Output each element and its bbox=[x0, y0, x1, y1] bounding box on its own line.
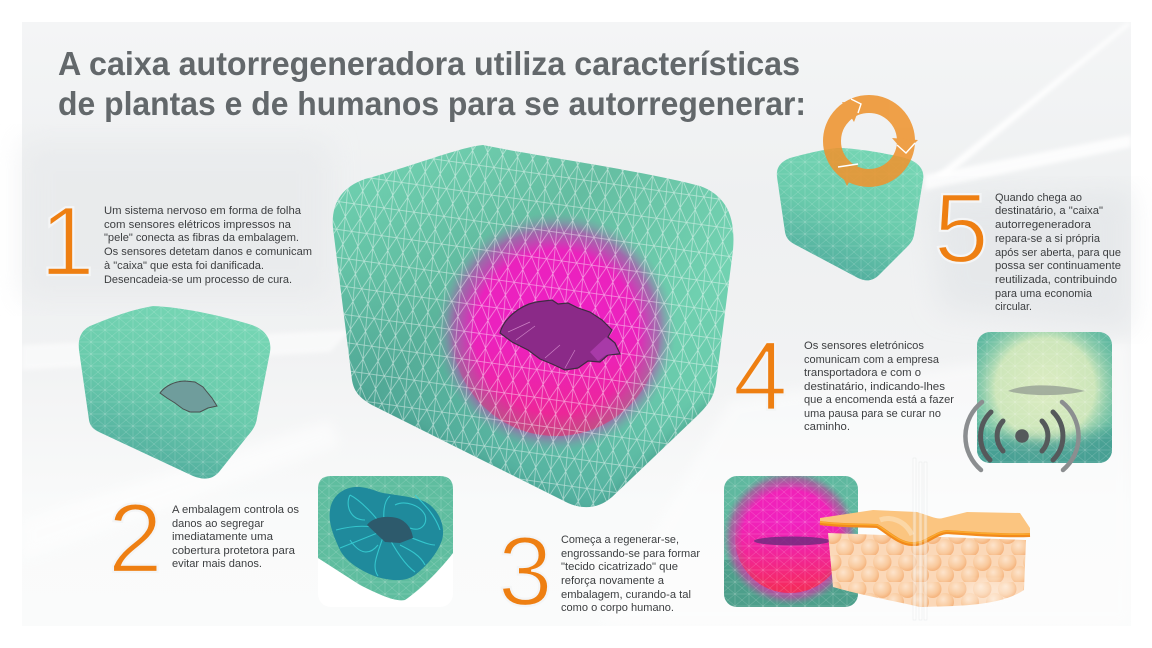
title: A caixa autorregeneradora utiliza características bbox=[58, 45, 800, 82]
step 3 text: engrossando-se para formar bbox=[561, 548, 700, 560]
step 1 box with hole bbox=[79, 306, 270, 479]
step 3 text: "tecido cicatrizado" que bbox=[561, 561, 678, 573]
step 2 text: imediatamente uma bbox=[172, 531, 274, 543]
step 4 text bbox=[804, 340, 954, 433]
step 4 bbox=[736, 332, 1112, 472]
step 3 bbox=[498, 458, 1030, 626]
step 5 text: autorregeneradora bbox=[995, 219, 1092, 231]
step 4 text: Os sensores eletrónicos bbox=[804, 340, 925, 352]
step 3 text: reforça novamente a bbox=[561, 575, 665, 587]
wound in the central box bbox=[500, 300, 620, 370]
step 2 tile: protective coating bbox=[318, 476, 453, 607]
step 4 text: uma pausa para se curar no bbox=[804, 408, 941, 420]
step 5 bbox=[777, 99, 1121, 313]
number 4: 4 bbox=[733, 321, 788, 431]
icon: wireless signal bbox=[965, 402, 1079, 470]
step 4 text: destinatário, indicando-lhes bbox=[804, 381, 946, 393]
step 2 text: evitar mais danos. bbox=[172, 558, 262, 570]
step 5 text: Quando chega ao bbox=[995, 192, 1082, 204]
step 1 text: Um sistema nervoso em forma de folha bbox=[104, 205, 302, 217]
number 1: 1 bbox=[40, 186, 95, 296]
step 5 text bbox=[995, 192, 1121, 313]
central damaged box with pink healing zone bbox=[330, 140, 740, 530]
step 4 text: que a encomenda está a fazer bbox=[804, 394, 954, 406]
number 5: 5 bbox=[934, 173, 989, 283]
step 1 text bbox=[104, 205, 312, 286]
step 2 text: A embalagem controla os bbox=[172, 504, 299, 516]
skin cross-section with tissue layers bbox=[820, 458, 1030, 620]
step 1 text: com sensores elétricos impressos na bbox=[104, 219, 292, 231]
step 1 text: à "caixa" que esta foi danificada. bbox=[104, 260, 264, 272]
step 3 tile: scar tissue bbox=[722, 470, 858, 607]
step 4 text: caminho. bbox=[804, 421, 850, 433]
step 3 text: como o corpo humano. bbox=[561, 602, 674, 614]
icon: circular arrows bbox=[832, 99, 918, 186]
step 5 text: para uma economia bbox=[995, 288, 1093, 300]
step 2 text bbox=[172, 504, 299, 570]
glass fibres crossing the skin bbox=[913, 458, 927, 620]
step 5 text: após ser aberta, para que bbox=[995, 247, 1121, 259]
step 5 box, fully repaired bbox=[777, 148, 923, 280]
title: de plantas e de humanos para se autorregenerar: bbox=[58, 85, 806, 122]
number 3: 3 bbox=[498, 516, 553, 626]
step 5 text: repara-se a si própria bbox=[995, 233, 1101, 245]
step 3 text bbox=[561, 534, 700, 614]
step 1 bbox=[40, 186, 312, 479]
step 5 text: destinatário, a "caixa" bbox=[995, 205, 1103, 217]
step 1 text: Desencadeia-se um processo de cura. bbox=[104, 274, 292, 286]
step 4 tile: healed crack bbox=[977, 332, 1112, 463]
step 3 text: embalagem, curando-a tal bbox=[561, 589, 691, 601]
step 2 text: cobertura protetora para bbox=[172, 545, 296, 557]
step 5 text: possa ser continuamente bbox=[995, 260, 1121, 272]
step 2 bbox=[108, 476, 453, 607]
step 3 text: Começa a regenerar-se, bbox=[561, 534, 679, 546]
step 5 text: reutilizada, contribuindo bbox=[995, 274, 1117, 286]
step 1 text: "pele" conecta as fibras da embalagem. bbox=[104, 232, 299, 244]
step 1 text: Os sensores detetam danos e comunicam bbox=[104, 246, 312, 258]
step 2 text: danos ao segregar bbox=[172, 518, 264, 530]
step 4 text: transportadora e com o bbox=[804, 367, 921, 379]
title bbox=[58, 45, 806, 122]
step 4 text: comunicam com a empresa bbox=[804, 354, 940, 366]
step 5 text: circular. bbox=[995, 301, 1032, 313]
number 2: 2 bbox=[108, 483, 163, 593]
